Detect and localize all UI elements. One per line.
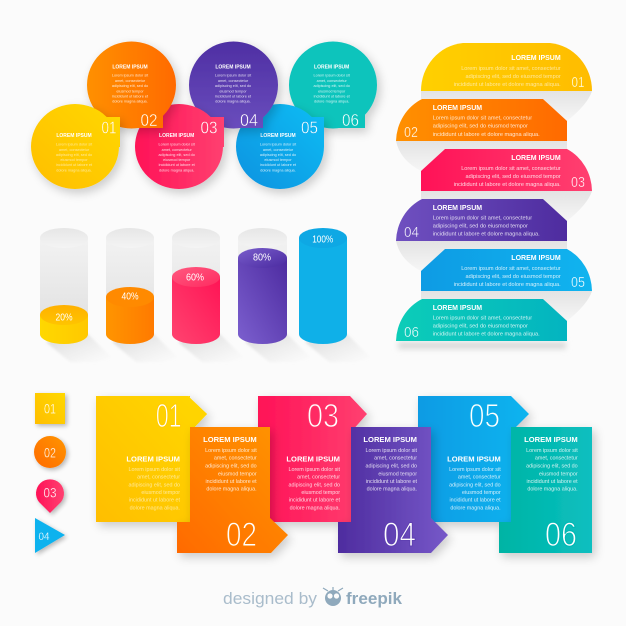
ribbon 06 teal: LOREM IPSUM [433, 305, 482, 312]
ribbon 06 teal: adipiscing elit, sed do eiusmod tempor [433, 324, 528, 330]
bar: 60% red: 60% [186, 273, 204, 284]
callout: 01 yellow circle: Lorem ipsum dolor sit [56, 142, 93, 146]
ribbon 03 red: LOREM IPSUM [511, 155, 561, 162]
card 01 yellow: incididunt ut labore et [129, 498, 180, 504]
bar: 80% purple [238, 228, 287, 344]
card 03 red: incididunt ut labore et [289, 498, 340, 504]
icon: 04 blue triangle: 04 [38, 531, 50, 543]
card 05 blue: Lorem ipsum dolor sit [449, 467, 501, 473]
callout: 03 red circle: Lorem ipsum dolor sit [159, 142, 196, 146]
card 06 teal: incididunt ut labore et [526, 479, 578, 485]
card 03 red: 03 [307, 397, 339, 434]
callout: 04 purple circle: amet, consectetur [218, 79, 249, 83]
card 01 yellow: 01 [156, 397, 182, 434]
icon: 02 orange circle [34, 436, 66, 468]
card 03 red [258, 396, 367, 522]
card 04 purple: dolore magna aliqua. [367, 487, 417, 493]
callout: 04 purple circle: adipiscing elit, sed do [215, 84, 251, 88]
callout: 02 orange circle: incididunt ut labore et [112, 94, 149, 98]
card 03 red: LOREM IPSUM [286, 454, 340, 464]
callout: 05 blue circle [236, 104, 324, 189]
callout: 01 yellow circle: incididunt ut labore et [56, 163, 93, 167]
icon: 02 orange circle: 02 [44, 444, 56, 460]
callout: 03 red circle: incididunt ut labore et [159, 163, 196, 167]
callout: 05 blue circle: adipiscing elit, sed do [260, 153, 296, 157]
callout: 06 teal circle: 06 [342, 110, 359, 130]
ribbon 04 purple: adipiscing elit, sed do eiusmod tempor [433, 224, 528, 230]
ribbon 02 orange: incididunt ut labore et dolore magna aliqua. [433, 132, 540, 138]
ribbon 02 orange: 02 [404, 124, 418, 141]
callout: 06 teal circle: Lorem ipsum dolor sit [314, 74, 351, 78]
callout: 01 yellow circle: adipiscing elit, sed do [56, 153, 92, 157]
bar: 20% yellow [40, 228, 88, 344]
card 01 yellow: amet, consectetur [137, 475, 180, 481]
callout: 03 red circle: adipiscing elit, sed do [159, 153, 195, 157]
ribbon 01 yellow: adipiscing elit, sed do eiusmod tempor [466, 74, 561, 80]
card 01 yellow: adipiscing elit, sed do [128, 482, 180, 488]
icon: 01 yellow square [35, 393, 65, 424]
callout: 01 yellow circle: amet, consectetur [59, 148, 90, 152]
icon: 01 yellow square: 01 [44, 400, 56, 416]
panel: overlapping circle callouts [31, 42, 377, 189]
ribbon 05 blue [421, 249, 592, 291]
callout: 04 purple circle: eiusmod tempor [219, 90, 247, 94]
ribbon 05 blue: adipiscing elit, sed do eiusmod tempor [466, 274, 561, 280]
callout: 06 teal circle: eiusmod tempor [318, 90, 346, 94]
card 03 red: dolore magna aliqua. [290, 505, 340, 511]
ribbon 04 purple: incididunt ut labore et dolore magna aliqua. [433, 232, 540, 238]
cylinder shadows [46, 334, 371, 362]
card 02 orange: 02 [226, 516, 257, 554]
ribbon 02 orange: Lorem ipsum dolor sit amet, consectetur [433, 115, 532, 121]
panel: numbered arrow cards [96, 396, 592, 554]
card 06 teal: eiusmod tempor [539, 471, 578, 477]
icon: 03 red map pin: 03 [44, 484, 57, 500]
callout: 02 orange circle [87, 42, 176, 130]
footer: freepik credit: designed by [223, 589, 318, 608]
card 02 orange: adipiscing elit, sed do [205, 463, 257, 469]
ribbon 03 red [421, 149, 592, 191]
callout: 03 red circle: LOREM IPSUM [159, 133, 194, 139]
callout: 04 purple circle: Lorem ipsum dolor sit [215, 74, 252, 78]
icon: 04 blue triangle [35, 518, 65, 553]
card 05 blue: eiusmod tempor [462, 490, 501, 496]
icon: 03 red map pin [36, 479, 64, 513]
ribbon 06 teal [396, 299, 567, 341]
callout: 02 orange circle: eiusmod tempor [116, 90, 144, 94]
ribbon 02 orange [396, 99, 567, 141]
ribbon 05 blue: Lorem ipsum dolor sit amet, consectetur [461, 266, 561, 272]
card 04 purple: Lorem ipsum dolor sit [365, 448, 418, 454]
panel: stacked ribbon list [396, 43, 592, 349]
ribbon 04 purple: Lorem ipsum dolor sit amet, consectetur [433, 216, 532, 222]
callout: 06 teal circle: LOREM IPSUM [314, 64, 349, 70]
callout: 06 teal circle [289, 42, 377, 130]
callout: 01 yellow circle: dolore magna aliqua. [56, 168, 92, 172]
bar: 60% red [172, 228, 220, 344]
ribbon 03 red: incididunt ut labore et dolore magna aliqua. [454, 182, 561, 188]
callout: 05 blue circle: amet, consectetur [263, 148, 294, 152]
card 06 teal [499, 427, 592, 554]
card 04 purple: incididunt ut labore et [366, 479, 417, 485]
callout: 01 yellow circle: LOREM IPSUM [56, 133, 92, 139]
callout: 03 red circle: dolore magna aliqua. [159, 168, 194, 172]
card 02 orange: incididunt ut labore et [205, 479, 257, 485]
callout: 05 blue circle: LOREM IPSUM [260, 133, 296, 139]
callout: 01 yellow circle: 01 [102, 118, 116, 138]
card 05 blue: incididunt ut labore et [449, 498, 501, 504]
card 05 blue [418, 396, 529, 522]
callout: 03 red circle [135, 104, 224, 189]
callout: 04 purple circle [189, 42, 278, 130]
bar: 20% yellow: 20% [56, 312, 73, 323]
card 06 teal: 06 [545, 516, 577, 554]
callout: 06 teal circle: amet, consectetur [317, 79, 348, 83]
card 05 blue: 05 [469, 397, 500, 434]
callout: 03 red circle: amet, consectetur [162, 148, 193, 152]
ribbon 01 yellow [421, 43, 592, 91]
ribbon 06 teal: incididunt ut labore et dolore magna aliqua. [433, 332, 540, 338]
card 02 orange [177, 427, 288, 554]
card 06 teal: amet, consectetur [535, 456, 578, 462]
card 05 blue: amet, consectetur [458, 475, 501, 481]
callout: 04 purple circle: 04 [240, 110, 258, 130]
card 04 purple: eiusmod tempor [378, 471, 417, 477]
card 01 yellow: dolore magna aliqua. [130, 505, 180, 511]
bar: 80% purple: 80% [253, 253, 271, 264]
callout: 04 purple circle: LOREM IPSUM [215, 64, 251, 70]
bar: 100% blue: 100% [312, 235, 333, 246]
ribbon 02 orange: LOREM IPSUM [433, 105, 482, 112]
callout: 06 teal circle: incididunt ut labore et [314, 94, 351, 98]
ribbon 03 red: 03 [571, 174, 585, 191]
callout: 05 blue circle: dolore magna aliqua. [260, 168, 296, 172]
card 06 teal: dolore magna aliqua. [527, 487, 578, 493]
card 01 yellow: eiusmod tempor [141, 490, 180, 496]
card 01 yellow: Lorem ipsum dolor sit [128, 467, 181, 473]
card 01 yellow: LOREM IPSUM [126, 454, 180, 464]
card 06 teal: adipiscing elit, sed do [526, 463, 578, 469]
ribbon 05 blue: LOREM IPSUM [511, 255, 561, 262]
callout: 02 orange circle: adipiscing elit, sed do [112, 84, 148, 88]
card 05 blue: adipiscing elit, sed do [449, 482, 501, 488]
callout: 06 teal circle: dolore magna aliqua. [314, 100, 349, 104]
card 04 purple: amet, consectetur [374, 456, 417, 462]
card 03 red: amet, consectetur [297, 475, 340, 481]
card 02 orange: LOREM IPSUM [203, 435, 257, 444]
callout: 05 blue circle: incididunt ut labore et [260, 163, 297, 167]
bar: 100% blue [299, 228, 347, 344]
ribbon 05 blue: 05 [571, 274, 585, 291]
ribbon 04 purple [396, 199, 567, 241]
ribbon 06 teal: 06 [404, 324, 419, 341]
icon: freepik mascot [323, 587, 343, 606]
ribbon 04 purple: 04 [404, 224, 419, 241]
card 04 purple: adipiscing elit, sed do [365, 463, 417, 469]
card 06 teal: Lorem ipsum dolor sit [526, 448, 578, 454]
card 02 orange: eiusmod tempor [218, 471, 257, 477]
card 01 yellow [96, 396, 207, 522]
callout: 05 blue circle: 05 [301, 118, 318, 138]
callout: 02 orange circle: LOREM IPSUM [112, 64, 148, 70]
ribbon 04 purple: LOREM IPSUM [433, 205, 482, 212]
fold shadows between ribbons [396, 91, 592, 349]
card 04 purple: 04 [383, 516, 416, 554]
card 02 orange: Lorem ipsum dolor sit [205, 448, 257, 454]
ribbon 02 orange: adipiscing elit, sed do eiusmod tempor [433, 123, 528, 129]
ribbon 01 yellow: 01 [572, 74, 584, 91]
callout: 04 purple circle: incididunt ut labore et [215, 94, 252, 98]
ribbon 03 red: adipiscing elit, sed do eiusmod tempor [466, 174, 561, 180]
ribbon 01 yellow: LOREM IPSUM [511, 55, 561, 62]
panel: small numbered markers [34, 393, 66, 553]
card 02 orange: dolore magna aliqua. [206, 487, 257, 493]
callout: 02 orange circle: Lorem ipsum dolor sit [112, 74, 149, 78]
card 05 blue: dolore magna aliqua. [450, 505, 501, 511]
ribbon 05 blue: incididunt ut labore et dolore magna aliqua. [454, 282, 561, 288]
chart: cylinder percentage bars [40, 228, 371, 362]
card 03 red: eiusmod tempor [301, 490, 340, 496]
card 05 blue: LOREM IPSUM [447, 454, 501, 464]
callout: 02 orange circle: dolore magna aliqua. [112, 100, 148, 104]
callout: 01 yellow circle: eiusmod tempor [60, 158, 88, 162]
bar: 40% orange: 40% [122, 292, 139, 303]
callout: 04 purple circle: dolore magna aliqua. [215, 100, 251, 104]
ribbon 01 yellow: Lorem ipsum dolor sit amet, consectetur [461, 66, 561, 72]
card 03 red: Lorem ipsum dolor sit [288, 467, 341, 473]
card 06 teal: LOREM IPSUM [524, 435, 578, 444]
card 03 red: adipiscing elit, sed do [288, 482, 340, 488]
bar: 40% orange [106, 228, 154, 344]
callout: 05 blue circle: eiusmod tempor [264, 158, 292, 162]
callout: 06 teal circle: adipiscing elit, sed do [314, 84, 350, 88]
ribbon 06 teal: Lorem ipsum dolor sit amet, consectetur [433, 316, 532, 322]
callout: 03 red circle: eiusmod tempor [163, 158, 191, 162]
ribbon 03 red: Lorem ipsum dolor sit amet, consectetur [461, 166, 561, 172]
card 02 orange: amet, consectetur [214, 456, 257, 462]
footer: freepik credit [223, 587, 403, 608]
footer: freepik credit: freepik [346, 589, 403, 608]
card 04 purple [338, 427, 448, 554]
callout: 03 red circle: 03 [200, 118, 218, 138]
callout: 01 yellow circle [31, 104, 120, 189]
card 04 purple: LOREM IPSUM [363, 435, 417, 444]
callout: 05 blue circle: Lorem ipsum dolor sit [260, 142, 297, 146]
callout: 02 orange circle: amet, consectetur [115, 79, 146, 83]
callout: 02 orange circle: 02 [140, 110, 158, 130]
ribbon 01 yellow: incididunt ut labore et dolore magna aliqua. [454, 82, 561, 88]
